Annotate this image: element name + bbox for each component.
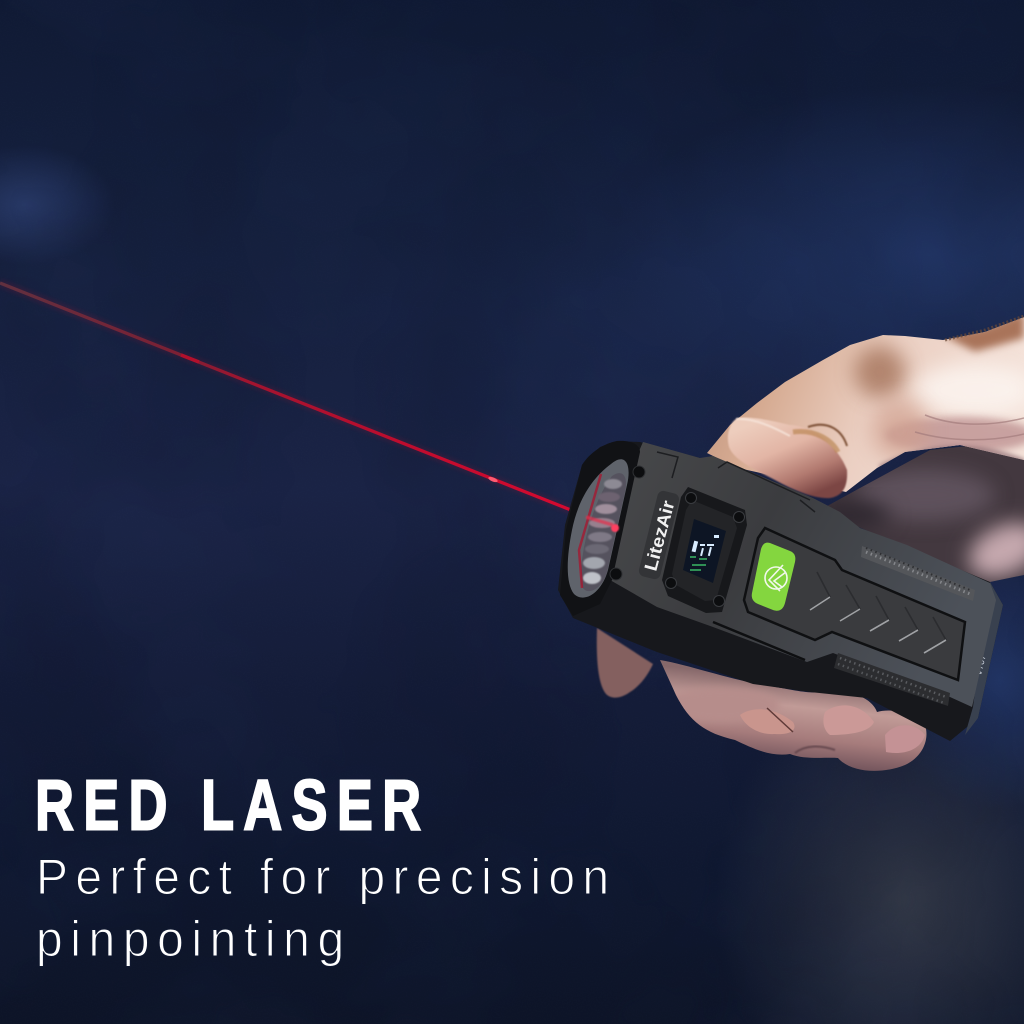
hand: lower fingers	[660, 660, 926, 771]
recessed panel	[744, 528, 965, 680]
device body: black side shell	[558, 441, 1003, 741]
lower grip dots	[834, 653, 950, 706]
top ridge details	[657, 452, 815, 512]
LED lens	[579, 473, 626, 591]
hair along wrist	[945, 316, 1024, 340]
subtitle	[36, 850, 609, 967]
display screws	[666, 492, 744, 606]
device model text: V707	[973, 654, 988, 676]
subtitle: pinpointing	[36, 912, 344, 967]
hand: rear finger	[597, 628, 653, 698]
button logo	[765, 565, 787, 591]
green button	[752, 543, 795, 611]
subtitle: Perfect for precision	[36, 850, 609, 905]
hand: back of hand	[700, 310, 1024, 500]
hand: palm in shadow	[828, 446, 1024, 582]
chevrons	[810, 572, 946, 653]
device right end strip	[965, 582, 1003, 735]
hand: thumb	[728, 418, 847, 498]
front bezel	[560, 441, 640, 616]
device face plate	[610, 442, 996, 707]
upper grip dots	[861, 546, 975, 601]
logo plate	[638, 490, 680, 580]
display housing	[662, 487, 747, 613]
heading: RED LASER	[35, 766, 421, 845]
lower groove	[713, 622, 805, 660]
flashlight device	[558, 441, 1003, 741]
display screen	[683, 519, 726, 583]
brand logo: LitezAir	[641, 498, 678, 573]
laser beam	[0, 283, 596, 520]
lens ring	[568, 459, 629, 598]
bezel screws	[610, 466, 645, 580]
